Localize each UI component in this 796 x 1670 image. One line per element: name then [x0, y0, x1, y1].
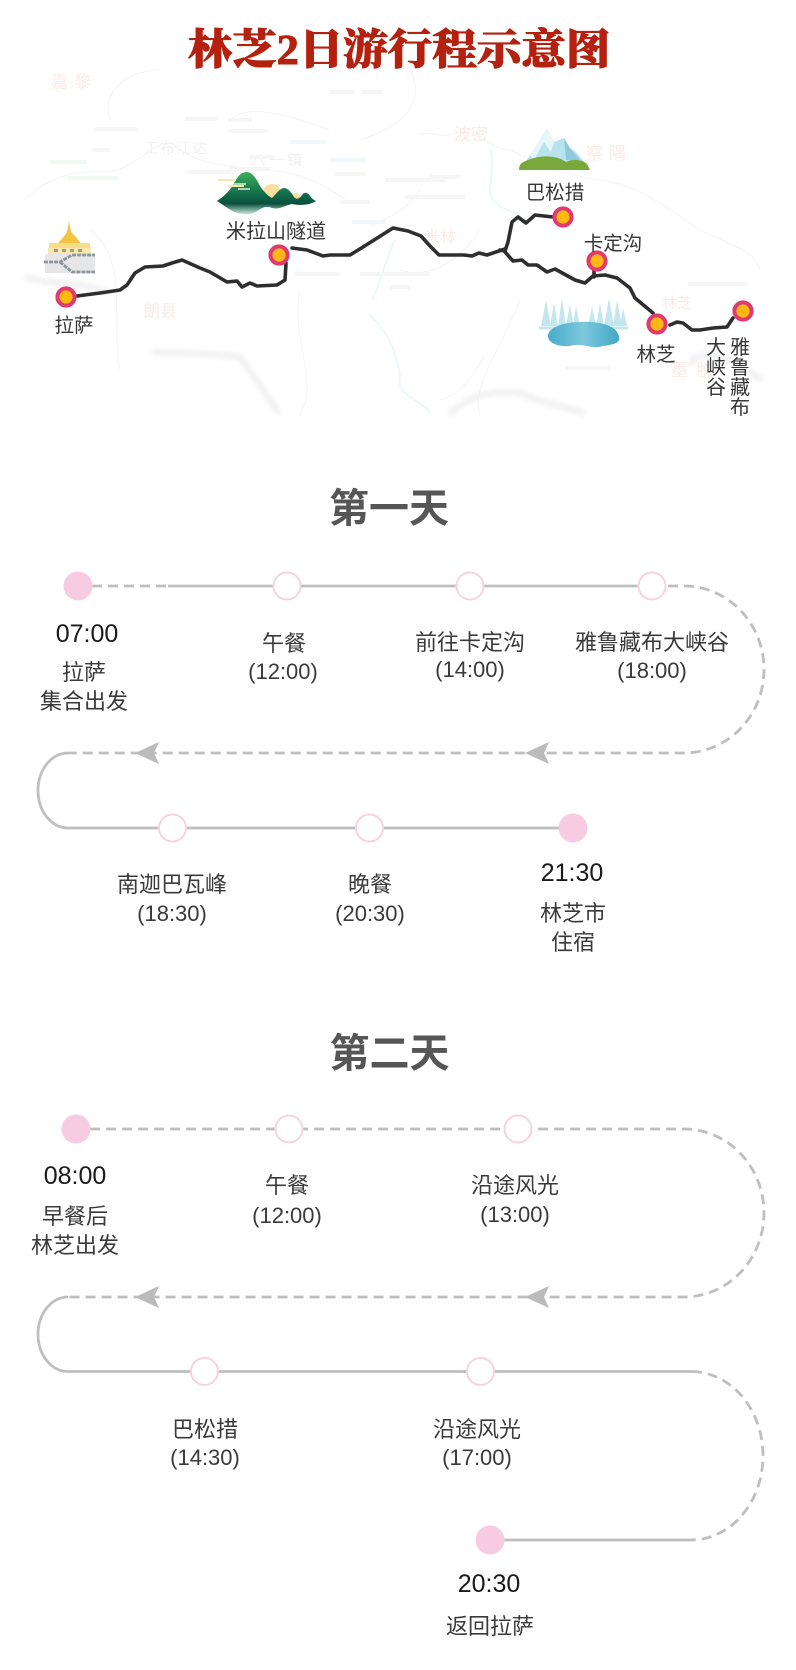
- stop: departure: [31, 1162, 119, 1258]
- stop: dinner: (20:30): [335, 901, 405, 926]
- arrows: [135, 1286, 549, 1308]
- stop: Namcha Barwa: (18:30): [137, 901, 207, 926]
- faint place names: 工布江达: [144, 140, 208, 157]
- stop: return: [446, 1570, 534, 1639]
- stop: Nyingchi: 林芝市: [540, 901, 606, 926]
- stop: Nyingchi: 住宿: [551, 930, 595, 955]
- icon: forest and lake: [539, 298, 628, 347]
- stop markers: [64, 572, 666, 842]
- map labels: 拉萨: [54, 315, 94, 337]
- stop: Kading valley: 前往卡定沟: [415, 630, 525, 655]
- map labels: 布: [730, 396, 750, 419]
- stop: Namcha Barwa: 南迦巴瓦峰: [117, 872, 227, 897]
- stop: Yarlung canyon: 雅鲁藏布大峡谷: [575, 630, 729, 655]
- faint map background: [24, 70, 762, 415]
- stop: Nyingchi: [540, 859, 606, 955]
- stop: Basum Lake: 巴松措: [172, 1417, 238, 1442]
- faint place names: 八一镇: [251, 152, 305, 169]
- stop: Lhasa: 07:00: [56, 620, 118, 648]
- stop: lunch: 午餐: [265, 1173, 309, 1198]
- stop: Namcha Barwa: [117, 872, 227, 926]
- stop: lunch: (12:00): [252, 1203, 322, 1228]
- stop: scenery: (13:00): [480, 1202, 550, 1227]
- map labels: 峡: [706, 356, 726, 379]
- icon: snow mountain: [519, 128, 590, 170]
- stop: return: 20:30: [458, 1570, 520, 1598]
- stop: Basum Lake: [170, 1417, 240, 1470]
- stop: scenery: 沿途风光: [433, 1417, 521, 1442]
- title: 林芝2日游行程示意图: [188, 26, 610, 74]
- stop: scenery: [433, 1417, 521, 1470]
- stop: Nyingchi: 21:30: [541, 859, 603, 887]
- arrows: [135, 742, 549, 764]
- stop: dinner: 晚餐: [348, 872, 392, 897]
- map labels: 鲁: [730, 356, 750, 379]
- day 2 timeline: [31, 1114, 764, 1639]
- stop: lunch: [248, 631, 318, 684]
- faint place names: 朗县: [143, 302, 177, 321]
- map labels: 雅: [730, 336, 750, 359]
- stop: Yarlung canyon: (18:00): [617, 658, 687, 683]
- faint place names: 嘉黎: [51, 73, 97, 92]
- stop: Lhasa: 拉萨: [62, 660, 106, 685]
- day 2 heading: 第二天: [330, 1032, 450, 1076]
- day 1 timeline: [38, 572, 764, 955]
- map labels: 藏: [730, 376, 750, 399]
- faint place names: 察隅: [586, 144, 632, 163]
- route map: [24, 70, 762, 419]
- faint place names: 墨脱: [671, 361, 721, 380]
- timeline path: [38, 1129, 764, 1540]
- day 1 heading: 第一天: [329, 487, 449, 531]
- stop: lunch: 午餐: [262, 631, 306, 656]
- map labels: [54, 182, 750, 419]
- stop: lunch: [252, 1173, 322, 1228]
- icon: Potala palace: [44, 221, 95, 273]
- stop: dinner: [335, 872, 405, 926]
- stop: Lhasa: 集合出发: [40, 689, 128, 714]
- timeline path: [38, 586, 764, 828]
- map labels: 林芝: [636, 344, 676, 366]
- faint place names: 波密: [454, 125, 488, 144]
- map labels: 巴松措: [526, 182, 584, 204]
- stop: return: 返回拉萨: [446, 1614, 534, 1639]
- map labels: 米拉山隧道: [226, 220, 326, 243]
- stop: departure: 早餐后: [42, 1204, 108, 1229]
- stop: departure: 林芝出发: [31, 1233, 119, 1258]
- stop: Kading valley: (14:00): [435, 657, 505, 682]
- stop: Lhasa: [40, 620, 128, 714]
- map labels: 谷: [706, 376, 726, 399]
- stop: scenery: 沿途风光: [471, 1173, 559, 1198]
- faint place names: [51, 73, 721, 380]
- map labels: 卡定沟: [584, 233, 642, 255]
- faint place names: 米林: [424, 228, 456, 246]
- stop: Basum Lake: (14:30): [170, 1445, 240, 1470]
- route line: [77, 215, 733, 330]
- stop: scenery: [471, 1173, 559, 1227]
- stop: lunch: (12:00): [248, 659, 318, 684]
- stop: Kading valley: [415, 630, 525, 682]
- stop markers: [62, 1114, 532, 1554]
- stop: scenery: (17:00): [442, 1445, 512, 1470]
- stop: departure: 08:00: [44, 1162, 106, 1190]
- stop: Yarlung canyon: [575, 630, 729, 683]
- icon: green mountain: [217, 172, 316, 214]
- map markers: [57, 208, 752, 333]
- map labels: 大: [706, 336, 726, 359]
- faint place names: 林芝: [662, 295, 692, 312]
